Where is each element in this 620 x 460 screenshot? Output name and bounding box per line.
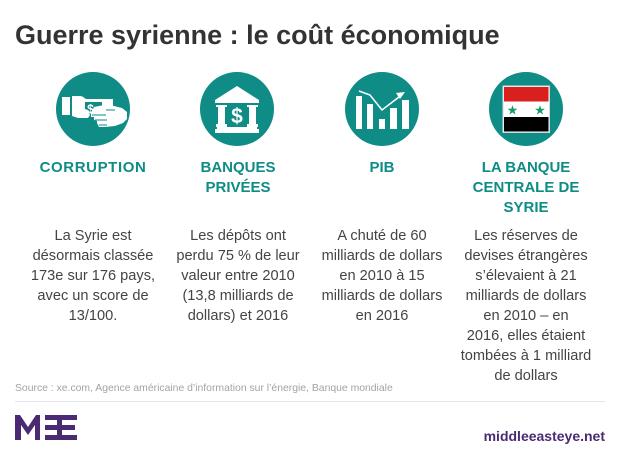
- text: private banks: valeur entre 2010: [181, 268, 295, 284]
- heading: corruption: CORRUPTION: [40, 159, 146, 176]
- icon: bank: $: [231, 105, 243, 128]
- heading: central bank: LA BANQUE: [482, 159, 570, 176]
- heading: central bank: CENTRALE DE: [473, 179, 579, 196]
- text: corruption: 13/100.: [69, 308, 117, 324]
- text: corruption: La Syrie est: [54, 228, 132, 244]
- text: central bank: milliards de dollars: [466, 288, 586, 304]
- site URL: middleeasteye.net: [484, 428, 605, 444]
- icon: corruption hand and banknote: [56, 72, 130, 146]
- text: central bank: s’élevaient à 21: [475, 268, 577, 284]
- text: central bank: en 2010 – en: [483, 308, 569, 324]
- text: private banks: perdu 75 % de leur: [176, 248, 300, 264]
- text: central bank: 2016, elles étaient: [467, 328, 585, 344]
- text: corruption: 173e sur 176 pays,: [31, 268, 155, 284]
- text: central bank: devises étrangères: [464, 248, 588, 264]
- icon: GDP bar chart with arrow: [345, 72, 419, 146]
- text: central bank: de dollars: [494, 368, 558, 384]
- icon: Syrian flag: ★: [507, 104, 518, 118]
- text: private banks: dollars) et 2016: [188, 308, 288, 324]
- heading: GDP: PIB: [369, 159, 394, 176]
- source note: Source : xe.com, Agence américaine d’information sur l’énergie, Banque mondiale: [15, 383, 393, 394]
- text: GDP: en 2010 à 15: [339, 268, 425, 284]
- text: corruption: désormais classée: [33, 248, 153, 264]
- text: private banks: (13,8 milliards de: [182, 288, 294, 304]
- text: private banks: [176, 228, 300, 324]
- icon: Syrian flag: ★: [534, 104, 546, 118]
- text: central bank: tombées à 1 milliard: [461, 348, 591, 364]
- text: GDP: milliards de dollars: [322, 288, 442, 304]
- icon: Syrian flag: [489, 72, 563, 146]
- text: GDP: [322, 228, 442, 324]
- text: private banks: Les dépôts ont: [190, 228, 286, 244]
- icon: corruption hand and banknote: $: [87, 102, 94, 116]
- title: Guerre syrienne : le coût économique: [15, 20, 500, 50]
- heading: central bank: [473, 159, 579, 216]
- text: GDP: A chuté de 60: [337, 228, 427, 244]
- text: central bank: Les réserves de: [474, 228, 578, 244]
- heading: central bank: SYRIE: [503, 199, 548, 216]
- heading: private banks: [200, 159, 276, 196]
- heading: private banks: BANQUES: [200, 159, 276, 176]
- text: corruption: [31, 228, 155, 324]
- text: GDP: milliards de dollars: [322, 248, 442, 264]
- text: central bank: [460, 228, 591, 384]
- text: GDP: en 2016: [356, 308, 408, 324]
- heading: private banks: PRIVÉES: [205, 179, 271, 196]
- logo: MEE: [15, 415, 77, 440]
- text: corruption: avec un score de: [37, 288, 149, 304]
- icon: bank: [200, 72, 274, 146]
